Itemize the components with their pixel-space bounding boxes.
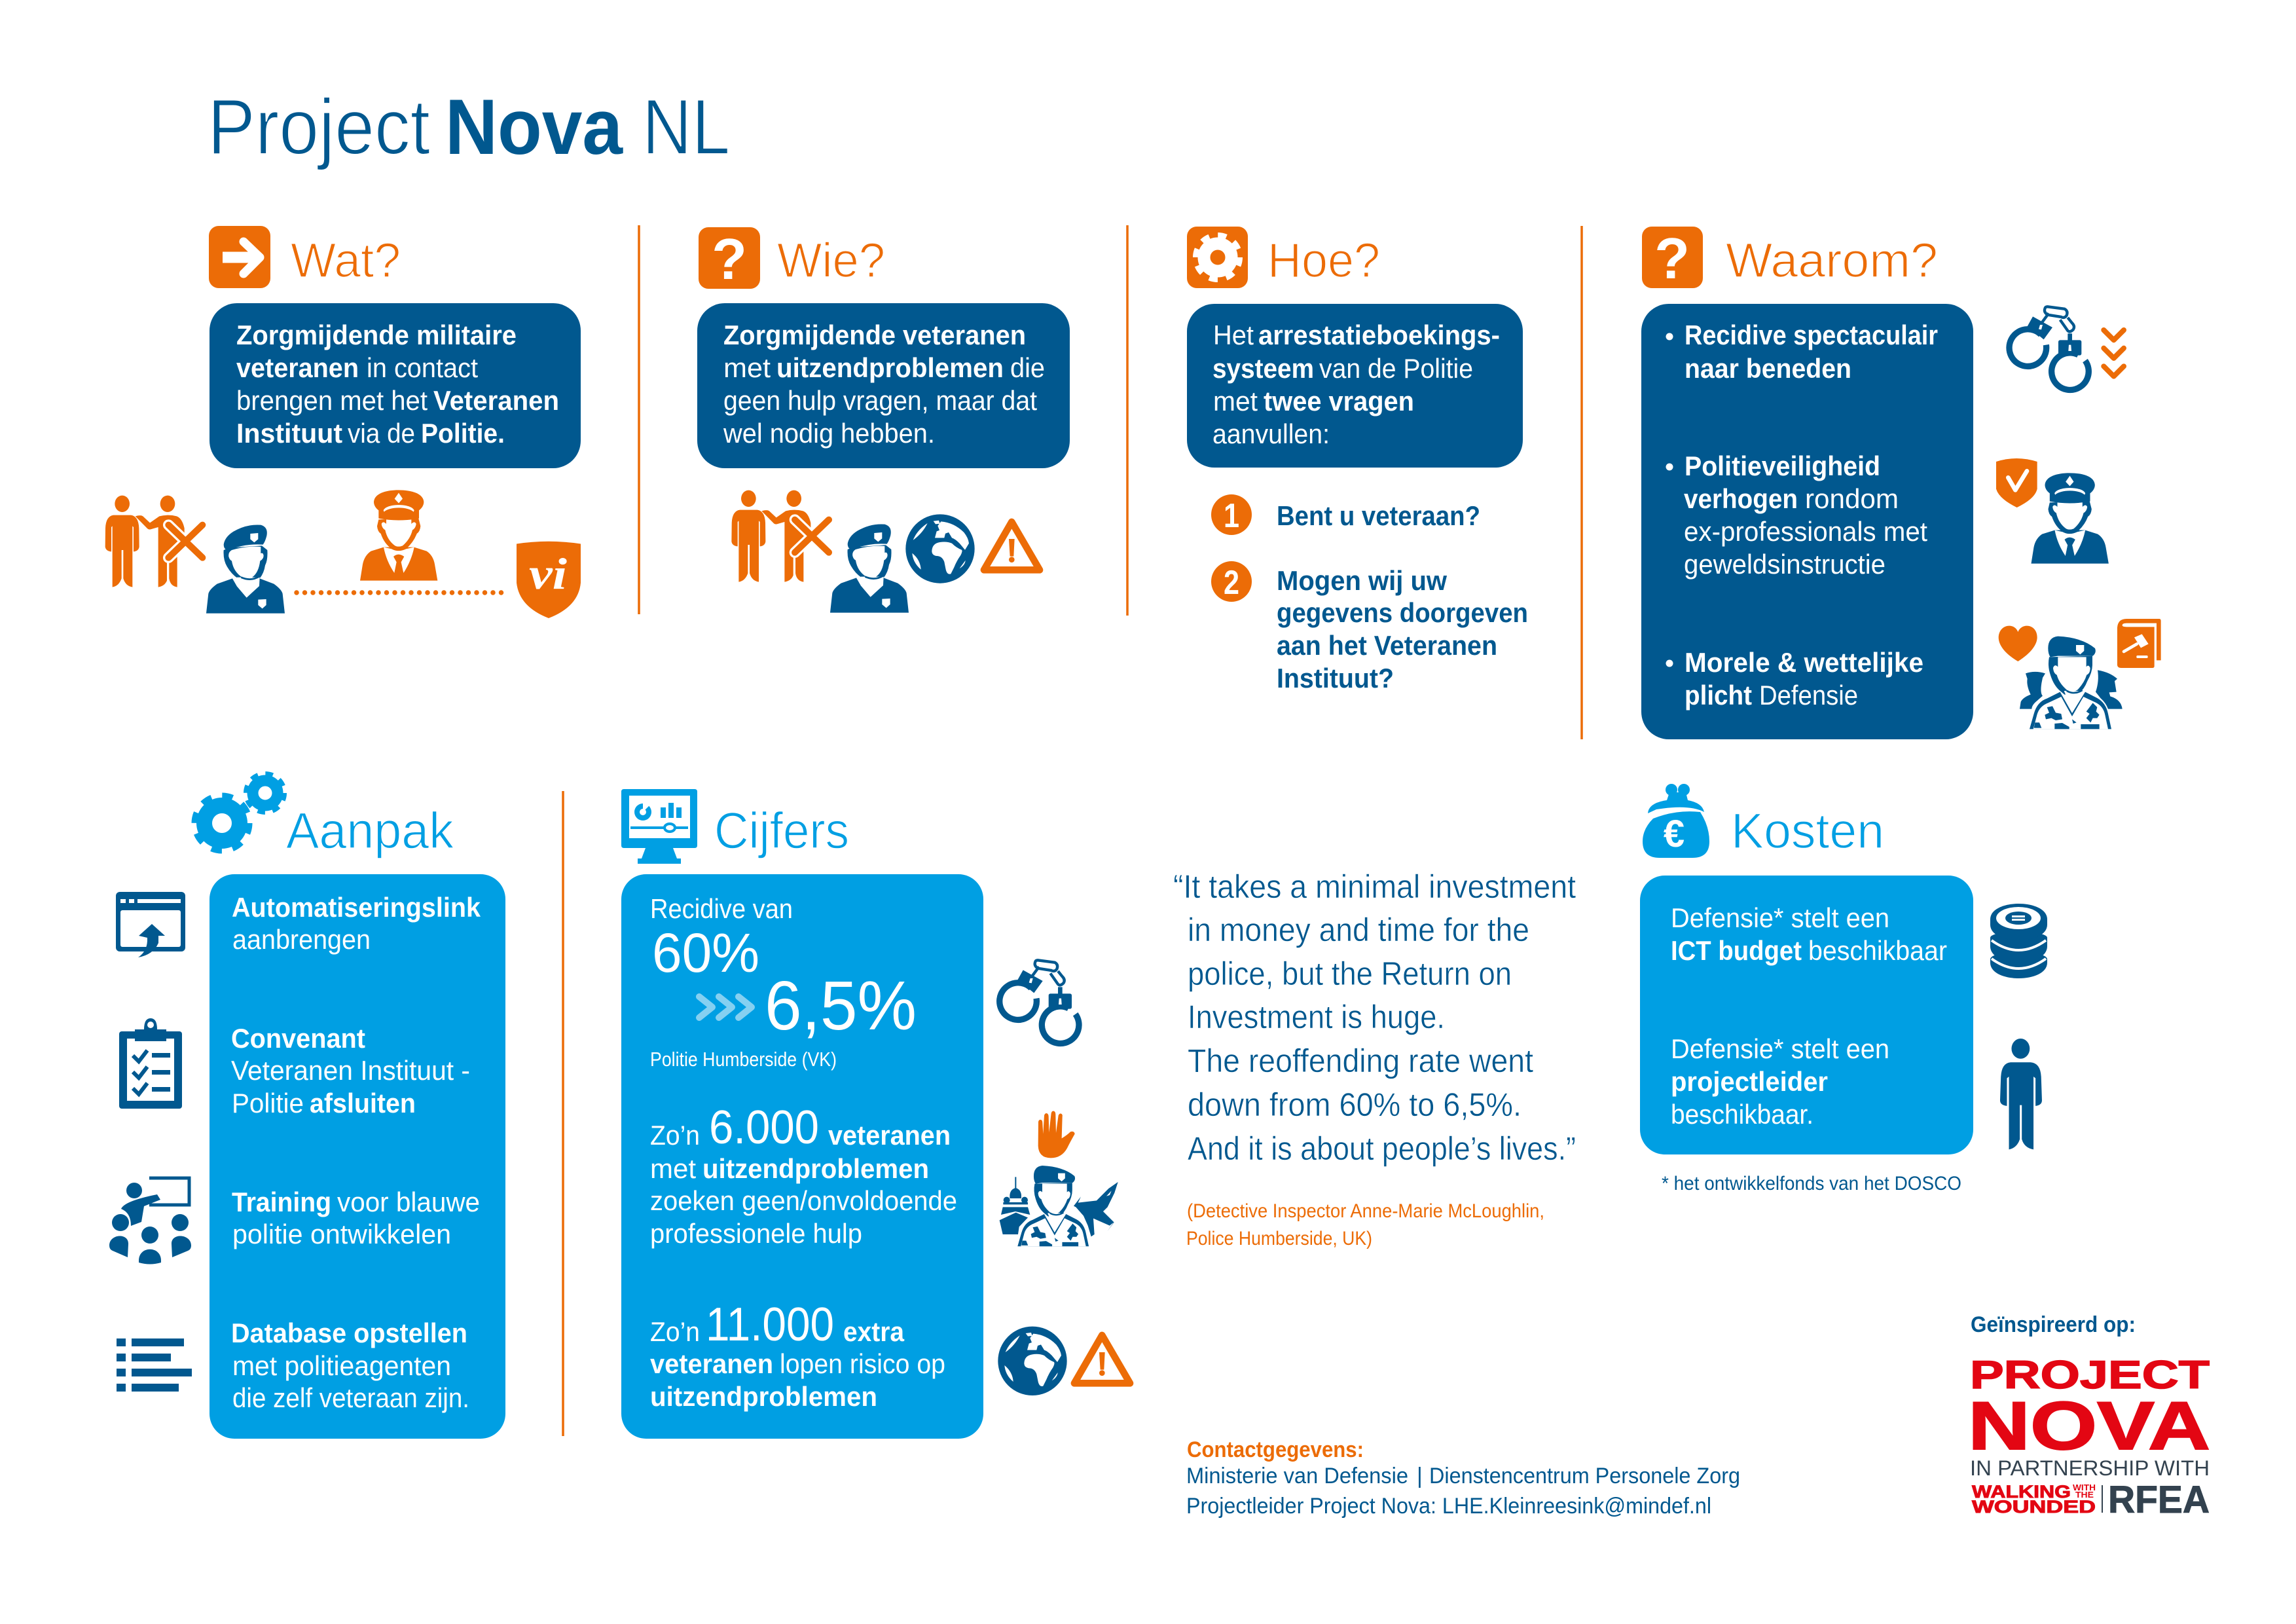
panel: Hoe?	[1187, 227, 1528, 693]
quote: Investment is huge.	[1188, 999, 1445, 1035]
box: Hoe description: Het	[1213, 320, 1254, 350]
icon: gears	[195, 774, 284, 850]
box: Aanpak steps: Training	[232, 1187, 331, 1217]
title: Project	[208, 83, 430, 171]
panel: Wat?	[105, 226, 581, 618]
contact details: Ministerie van Defensie	[1186, 1464, 1408, 1488]
box: Wie description: Zorgmijdende veteranen	[723, 320, 1026, 350]
icon: question square: ?	[1654, 226, 1690, 291]
box: Cijfers statistics: Zo’n	[650, 1120, 700, 1151]
box: Waarom reasons: Morele & wettelijke	[1685, 647, 1923, 678]
logo: Project Nova: THE	[2075, 1490, 2094, 1500]
logo: Project Nova: IN PARTNERSHIP WITH	[1970, 1456, 2210, 1480]
icon: list	[117, 1338, 192, 1392]
box: Cijfers statistics: veteranen	[828, 1120, 951, 1151]
quote attribution	[1186, 1200, 1544, 1249]
box: Aanpak steps: Automatiseringslink	[232, 892, 481, 923]
quote: down from 60% to 6,5%.	[1188, 1086, 1522, 1123]
box: Cijfers statistics: met	[650, 1153, 696, 1184]
quote: “It takes a minimal investment	[1173, 868, 1576, 905]
box: Wat description: Instituut	[236, 418, 342, 449]
icon: shield with check	[1996, 458, 2037, 507]
box: Cijfers statistics: 6,5%	[765, 967, 917, 1044]
contact details: Dienstencentrum Personele Zorg	[1429, 1464, 1740, 1488]
question 2: 2	[1224, 564, 1239, 602]
box: Hoe description	[1187, 304, 1523, 468]
box: Aanpak steps: voor blauwe	[337, 1187, 480, 1217]
icon: vi shield: vi	[529, 549, 567, 599]
icon: gear square	[1187, 227, 1248, 288]
icon: veterans group with cross	[731, 490, 829, 582]
logo: Project Nova: RFEA	[2108, 1479, 2210, 1521]
question 1: 1	[1224, 497, 1239, 535]
box: Hoe description: systeem	[1212, 353, 1314, 384]
logo: Project Nova: Geïnspireerd op:	[1971, 1312, 2136, 1337]
box: Hoe description: arrestatieboekings-	[1258, 320, 1500, 350]
box: Hoe description: aanvullen:	[1212, 418, 1330, 449]
heading: Hoe?: Hoe?	[1267, 233, 1380, 287]
icon: question square	[699, 227, 760, 291]
box: Hoe description: van de Politie	[1319, 353, 1473, 384]
box: Aanpak steps: Convenant	[231, 1023, 365, 1054]
divider	[1580, 226, 1583, 739]
box: Cijfers statistics: zoeken geen/onvoldoende	[650, 1185, 957, 1216]
icon: person	[2000, 1039, 2042, 1149]
box: Kosten items: projectleider	[1671, 1066, 1828, 1097]
box: Wat description: Politie.	[421, 418, 505, 449]
icon: handcuffs	[2009, 306, 2088, 390]
icon: handcuffs	[1000, 960, 1079, 1043]
box: Aanpak steps: aanbrengen	[232, 924, 371, 955]
logo: Project Nova: WALKING	[1972, 1482, 2071, 1502]
quote: And it is about people’s lives.”	[1188, 1130, 1576, 1167]
title: NL	[642, 83, 730, 171]
icon: police officer	[360, 490, 437, 581]
box: Wat description: in contact	[367, 352, 478, 383]
box: Hoe description: met	[1213, 386, 1258, 416]
icon: veteran	[830, 524, 909, 613]
question 1	[1211, 494, 1480, 535]
box: Cijfers statistics: lopen risico op	[780, 1348, 945, 1379]
box: Cijfers statistics: uitzendproblemen	[702, 1153, 929, 1184]
icon: down chevrons	[2104, 330, 2124, 377]
panel: Aanpak	[109, 774, 505, 1439]
box: Kosten items: beschikbaar.	[1671, 1099, 1813, 1130]
box: Cijfers statistics: professionele hulp	[650, 1218, 862, 1249]
icon: warning triangle	[1074, 1335, 1130, 1383]
box: Wie description: geen hulp vragen, maar dat	[723, 385, 1037, 416]
logo: Project Nova: NOVA	[1968, 1388, 2210, 1464]
box: Waarom reasons: verhogen	[1684, 483, 1798, 514]
icon: veterans group with cross	[105, 496, 202, 587]
box: Wat description	[210, 303, 581, 468]
box: Hoe description: twee vragen	[1264, 386, 1414, 416]
logo: Project Nova: WITH	[2073, 1483, 2096, 1492]
box: Kosten items	[1640, 876, 1973, 1154]
box: Waarom reasons	[1641, 304, 1973, 739]
icon: question square: ?	[712, 227, 747, 291]
icon: browser window with upload arrow	[116, 892, 185, 957]
quote: The reoffending rate went	[1188, 1043, 1533, 1079]
box: Cijfers statistics: 6.000	[709, 1101, 819, 1154]
question 2: gegevens doorgeven	[1277, 597, 1528, 628]
question 2	[1211, 561, 1528, 693]
heading: Aanpak: Aanpak	[286, 802, 454, 859]
icon: police officer	[2031, 473, 2109, 564]
box: Waarom reasons: geweldsinstructie	[1684, 549, 1886, 580]
box: Kosten items: Defensie* stelt een	[1671, 902, 1889, 933]
icon: arrow square	[209, 226, 270, 288]
icon: veteran	[206, 525, 285, 614]
box: Cijfers statistics	[621, 874, 983, 1439]
title: Nova	[445, 83, 623, 171]
box: Aanpak steps: afsluiten	[310, 1088, 416, 1118]
question 1: Bent u veteraan?	[1277, 500, 1480, 531]
quote attribution: (Detective Inspector Anne-Marie McLoughlin,	[1187, 1200, 1544, 1222]
icon: heart	[1999, 626, 2037, 661]
box: Waarom reasons: rondom	[1805, 483, 1899, 514]
box: Wie description: wel nodig hebben.	[723, 418, 935, 449]
dotted connector	[297, 590, 501, 595]
box: Wie description: die	[1010, 352, 1045, 383]
contact details: |	[1417, 1464, 1423, 1488]
footnote: * het ontwikkelfonds van het DOSCO	[1662, 1173, 1961, 1194]
box: Waarom reasons: Recidive spectaculair	[1685, 320, 1938, 350]
box: Wat description: Veteranen	[433, 385, 559, 416]
title	[208, 83, 730, 171]
icon: coin stack	[1990, 904, 2047, 978]
icon: money bag	[1643, 784, 1709, 858]
icon: soldier with ship and jet	[1000, 1166, 1118, 1246]
box: Wat description: veteranen	[236, 352, 359, 383]
box: Cijfers statistics: 60%	[652, 922, 759, 984]
box: Aanpak steps: Politie	[232, 1088, 304, 1118]
box: Waarom reasons: ex-professionals met	[1684, 516, 1927, 547]
question 2: aan het Veteranen	[1277, 630, 1497, 661]
box: Wie description: met	[723, 352, 771, 383]
box: Kosten items: ICT budget	[1671, 935, 1802, 966]
logo: Project Nova	[1968, 1312, 2210, 1521]
logo: Project Nova: PROJECT	[1970, 1353, 2210, 1397]
box: Aanpak steps: met politieagenten	[232, 1350, 451, 1381]
heading: Kosten: Kosten	[1731, 803, 1884, 859]
logo: Project Nova: WOUNDED	[1972, 1497, 2096, 1517]
heading: Wat?: Wat?	[291, 233, 401, 287]
icon: warning triangle	[984, 522, 1040, 570]
quote attribution: Police Humberside, UK)	[1186, 1228, 1372, 1249]
contact details: Contactgegevens:	[1187, 1437, 1364, 1462]
icon: question square	[1642, 226, 1703, 291]
divider	[562, 791, 564, 1436]
icon: vi shield	[517, 542, 581, 618]
heading: Wie?: Wie?	[777, 233, 885, 287]
box: Cijfers statistics: Recidive van	[650, 893, 793, 924]
heading: Cijfers: Cijfers	[714, 802, 849, 859]
question 2: Instituut?	[1277, 663, 1394, 693]
icon: globe	[998, 1327, 1067, 1395]
icon: soldier with family	[2020, 637, 2123, 729]
panel: Waarom?	[1641, 226, 2161, 739]
quote: in money and time for the	[1188, 912, 1529, 948]
divider	[1126, 225, 1129, 616]
icon: stop hand	[1038, 1111, 1075, 1158]
box: Waarom reasons: Politieveiligheid	[1685, 451, 1880, 481]
box: Cijfers statistics: 11.000	[706, 1299, 834, 1351]
icon: clipboard checklist	[119, 1018, 182, 1109]
panel: Wie?	[697, 227, 1070, 613]
icon: globe	[905, 514, 975, 583]
box: Aanpak steps: Database opstellen	[231, 1318, 467, 1348]
icon: law book	[2117, 619, 2161, 668]
box: Cijfers statistics: Zo’n	[650, 1316, 700, 1347]
contact details: Projectleider Project Nova: LHE.Kleinreesink@mindef.nl	[1186, 1494, 1711, 1519]
box: Aanpak steps: Veteranen Instituut -	[231, 1055, 470, 1086]
box: Waarom reasons: naar beneden	[1685, 353, 1851, 384]
heading: Waarom?: Waarom?	[1726, 233, 1938, 287]
box: Wie description: uitzendproblemen	[776, 352, 1004, 383]
icon: money bag: €	[1664, 813, 1685, 855]
box: Cijfers statistics: Politie Humberside (VK)	[650, 1048, 837, 1071]
divider	[638, 225, 640, 614]
box: Aanpak steps: die zelf veteraan zijn.	[232, 1382, 469, 1413]
box: Kosten items: Defensie* stelt een	[1671, 1033, 1889, 1064]
quote	[1173, 868, 1576, 1167]
box: Cijfers statistics: uitzendproblemen	[650, 1381, 877, 1412]
box: Wat description: brengen met het	[236, 385, 428, 416]
panel: Kosten	[1640, 784, 2047, 1194]
box: Cijfers statistics: veteranen	[650, 1348, 773, 1379]
box: Waarom reasons: plicht	[1685, 680, 1752, 710]
box: Cijfers statistics: extra	[843, 1316, 905, 1347]
icon: monitor with charts	[621, 789, 697, 864]
box: Wie description	[697, 303, 1070, 468]
box: Kosten items: beschikbaar	[1808, 935, 1947, 966]
quote: police, but the Return on	[1188, 955, 1512, 992]
panel: Cijfers	[621, 789, 1130, 1439]
box: Waarom reasons: Defensie	[1759, 680, 1858, 710]
box: Wat description: via de	[348, 418, 415, 449]
contact details	[1186, 1437, 1740, 1519]
box: Wat description: Zorgmijdende militaire	[236, 320, 517, 350]
question 2: Mogen wij uw	[1277, 565, 1447, 596]
icon: training group	[109, 1178, 191, 1264]
box: Aanpak steps: politie ontwikkelen	[232, 1219, 451, 1249]
box: Aanpak steps	[210, 874, 505, 1439]
